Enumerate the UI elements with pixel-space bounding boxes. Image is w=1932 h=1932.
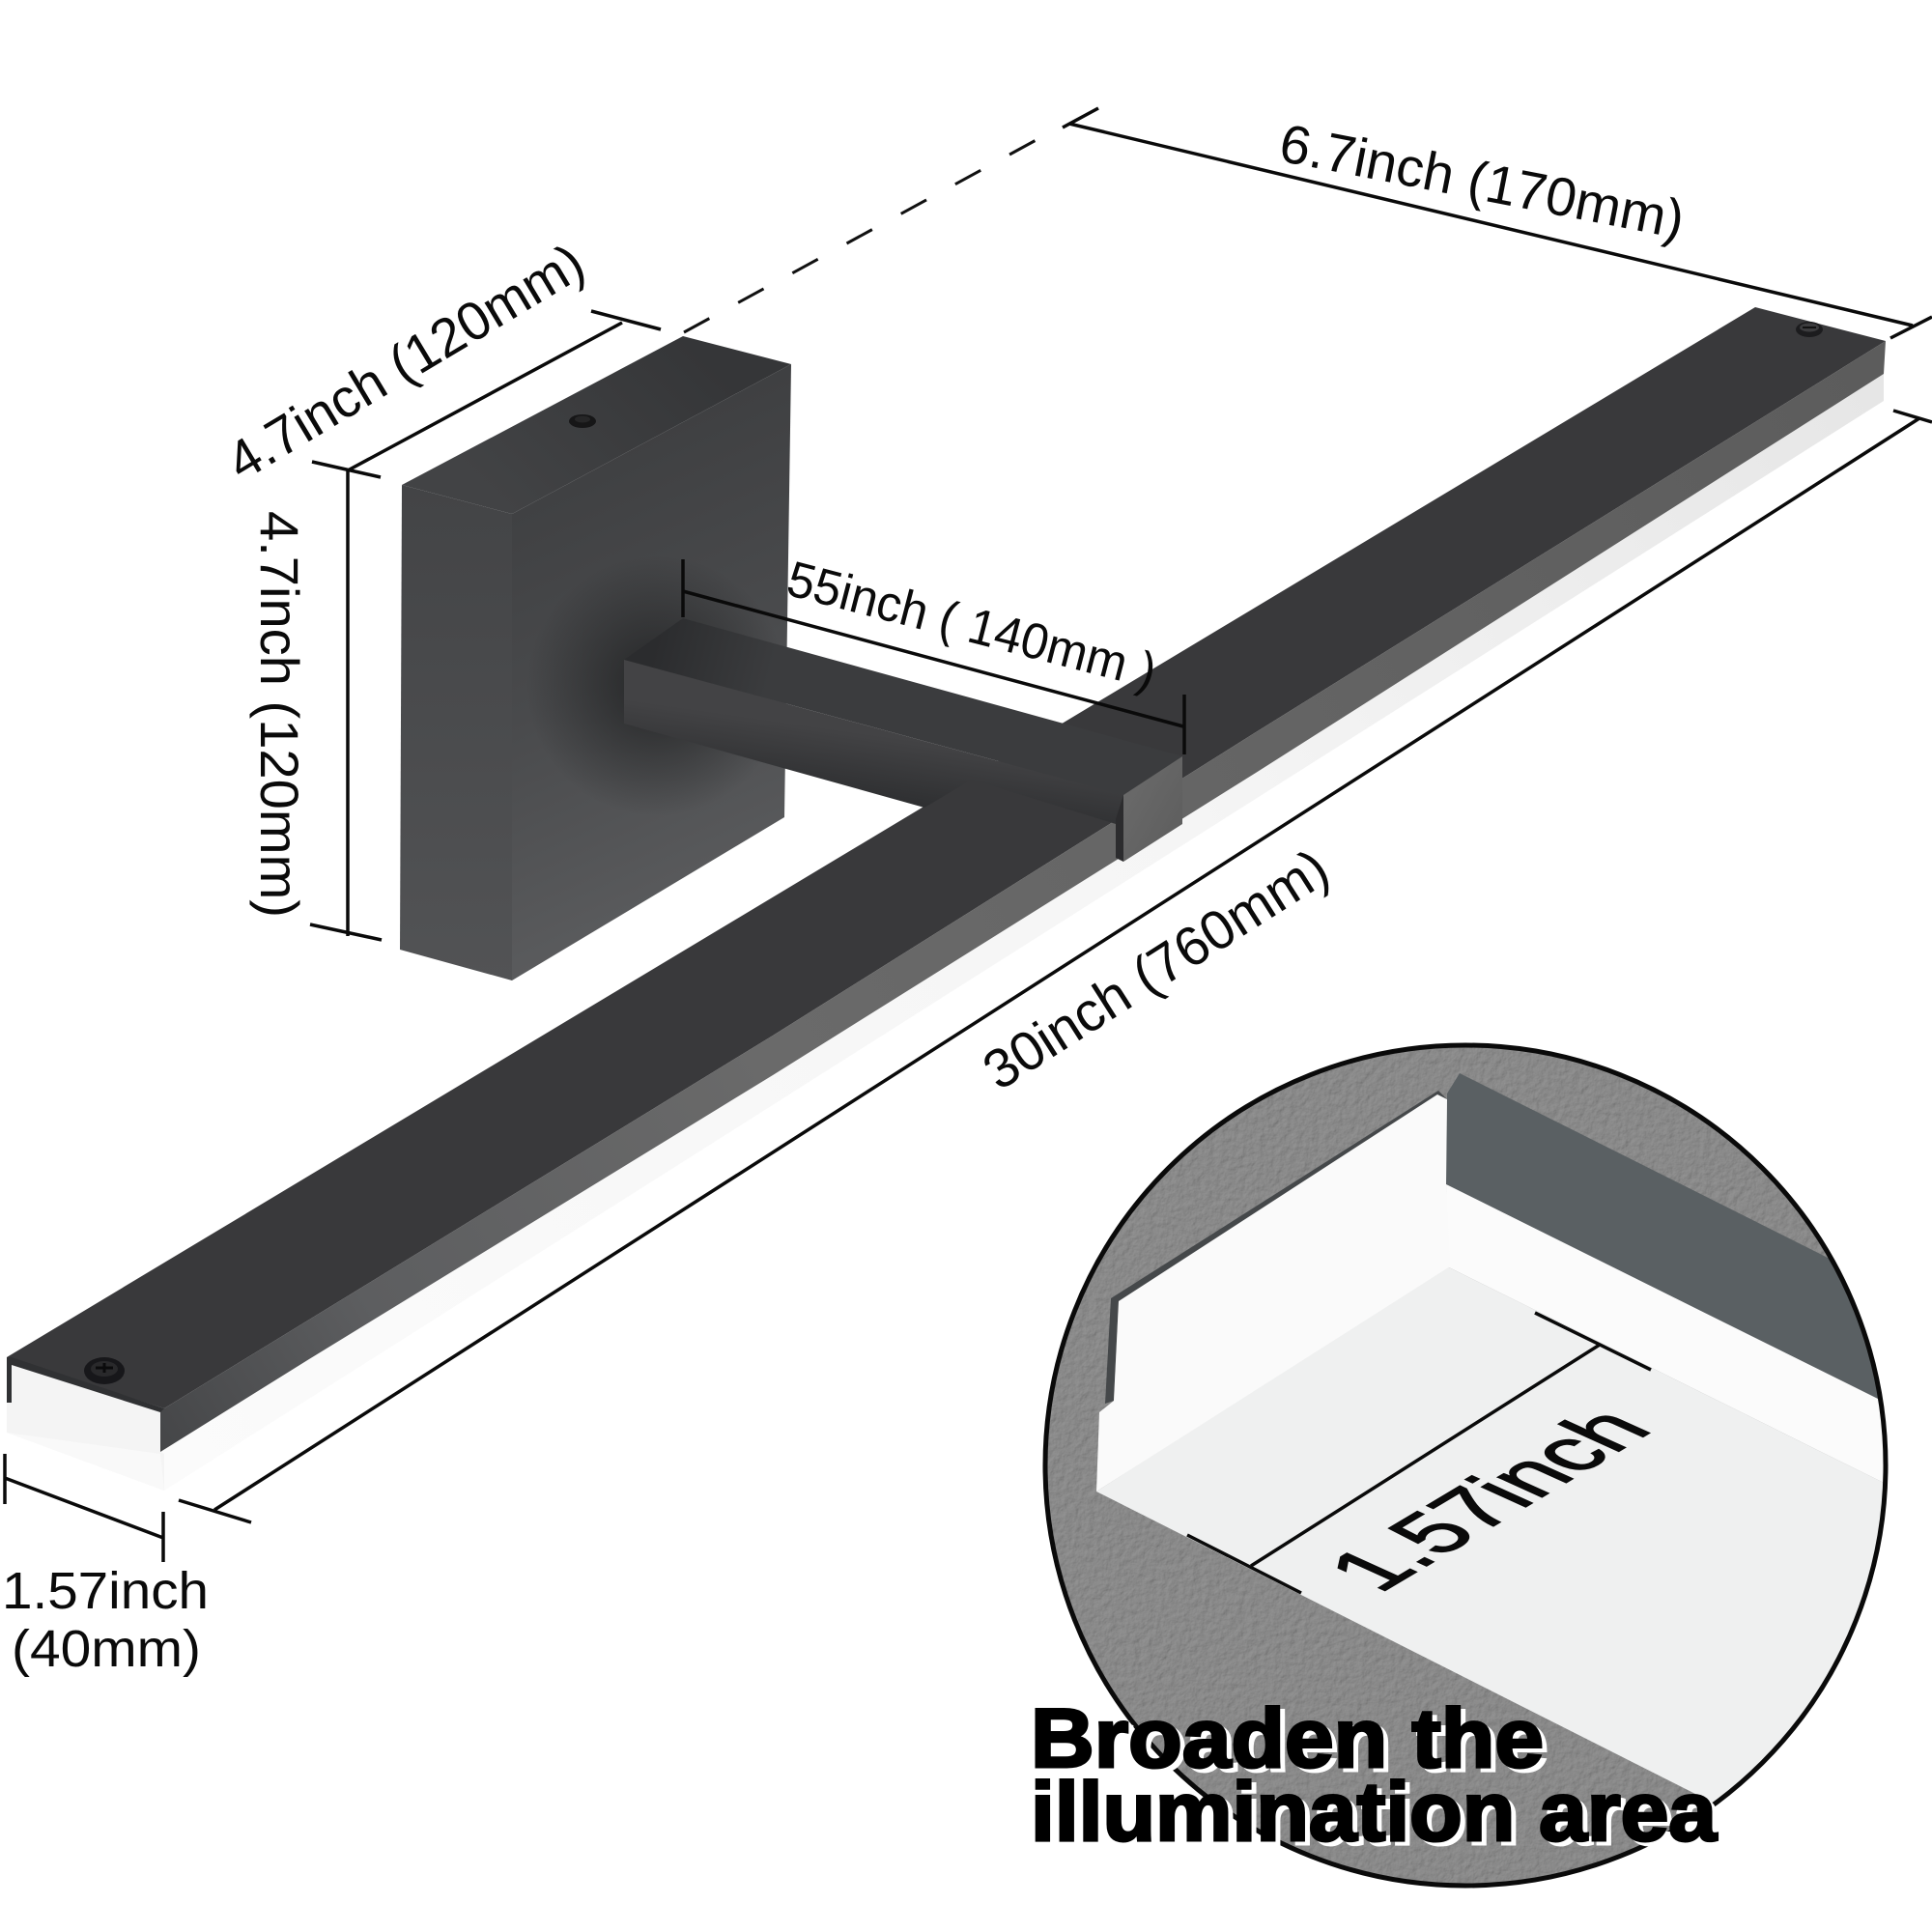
dimension: depth 6.7inch [684, 108, 1932, 338]
label: 1.57inch (40mm): (40mm) [12, 1620, 201, 1678]
dimension: plate width 4.7inch [216, 231, 661, 492]
icon: right bar screw [1796, 322, 1823, 337]
label: 30inch (760mm): 30inch (760mm) [973, 838, 1340, 1102]
heading: broaden the illumination area: Broaden the [1031, 1692, 1544, 1785]
label: 4.7inch (120mm) vertical: 4.7inch (120mm) [249, 511, 310, 918]
wall mounting plate [400, 336, 791, 980]
label: 1.57inch (40mm): 1.57inch [2, 1562, 209, 1620]
dimension: arm length 55inch [683, 551, 1184, 754]
heading: broaden the illumination area: illumination area [1031, 1766, 1718, 1859]
light bar [7, 307, 1886, 1491]
inner dimension: 1.57inch [1187, 1313, 1672, 1603]
label: 1.57inch (40mm) [2, 1562, 209, 1678]
panel: magnified detail circle [1038, 1038, 1893, 1893]
icon: plate screw [569, 414, 596, 428]
label: 4.7inch (120mm) top: 4.7inch (120mm) [216, 231, 594, 492]
label: 1.57inch inner: 1.57inch [1305, 1397, 1672, 1603]
heading: broaden the illumination area [1031, 1692, 1718, 1859]
wall texture [1038, 1038, 1893, 1893]
dimension: bar width 1.57inch [2, 1454, 209, 1678]
dimension: plate height 4.7inch [249, 470, 382, 940]
connecting arm [624, 618, 1182, 862]
label: 6.7inch (170mm): 6.7inch (170mm) [1275, 112, 1690, 250]
icon: left bar screw [84, 1357, 125, 1384]
label: 55inch ( 140mm ): 55inch ( 140mm ) [781, 551, 1162, 700]
